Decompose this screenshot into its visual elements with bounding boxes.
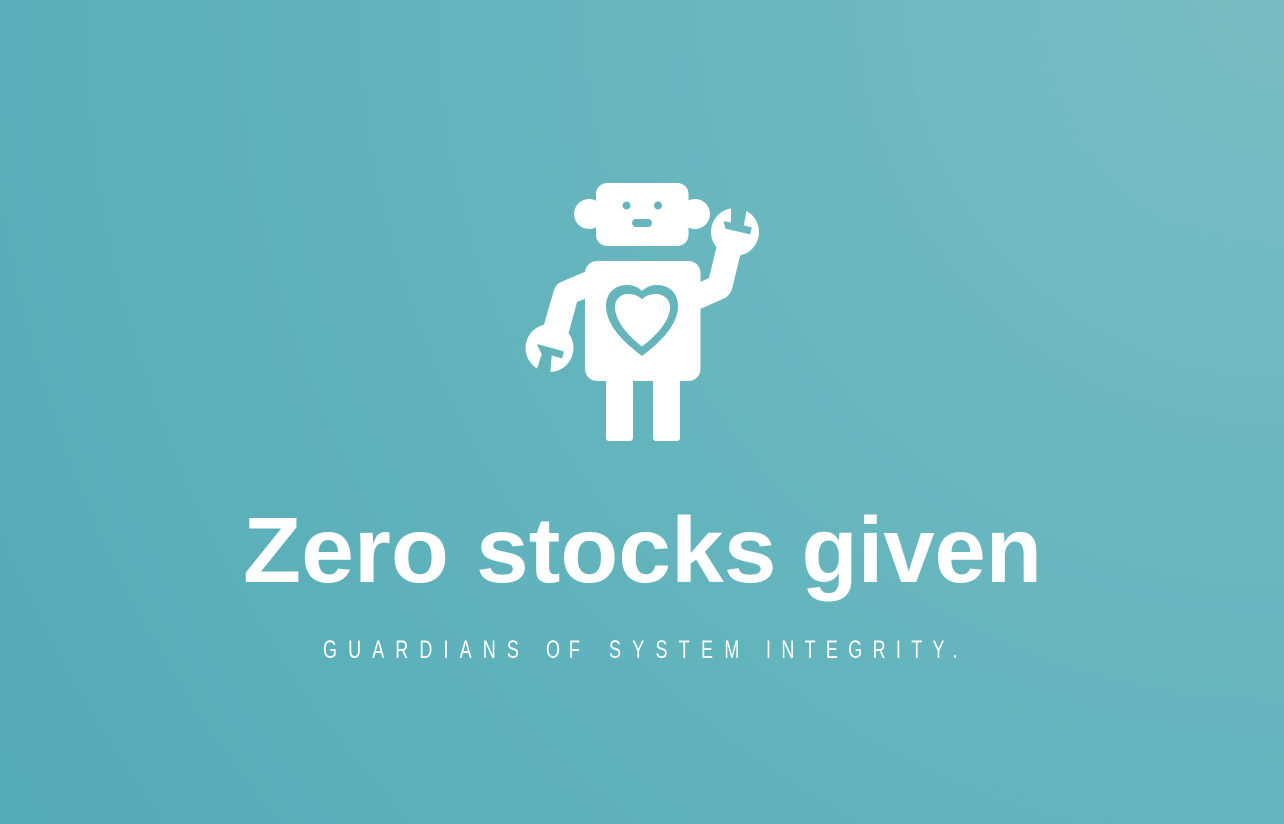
- subtitle: INTEGRITY.: [766, 635, 958, 664]
- subtitle: GUARDIANS: [323, 635, 519, 664]
- robot legs: [606, 370, 680, 441]
- title: Zero: [243, 498, 449, 602]
- robot body: [585, 261, 700, 381]
- robot left arm: [541, 271, 587, 343]
- subtitle: SYSTEM: [609, 635, 739, 664]
- title: [243, 498, 1042, 602]
- icon: robot holding wrenches: [526, 183, 759, 441]
- robot right arm: [698, 245, 741, 310]
- robot head: [596, 183, 688, 246]
- title: given: [802, 498, 1042, 602]
- subtitle: [323, 635, 958, 664]
- icon: right wrench: [711, 206, 759, 256]
- robot face: [622, 202, 662, 227]
- robot ears: [574, 199, 710, 229]
- icon: left wrench: [526, 324, 574, 374]
- icon: heart: [606, 285, 678, 356]
- subtitle: OF: [546, 635, 580, 664]
- title: stocks: [476, 498, 776, 602]
